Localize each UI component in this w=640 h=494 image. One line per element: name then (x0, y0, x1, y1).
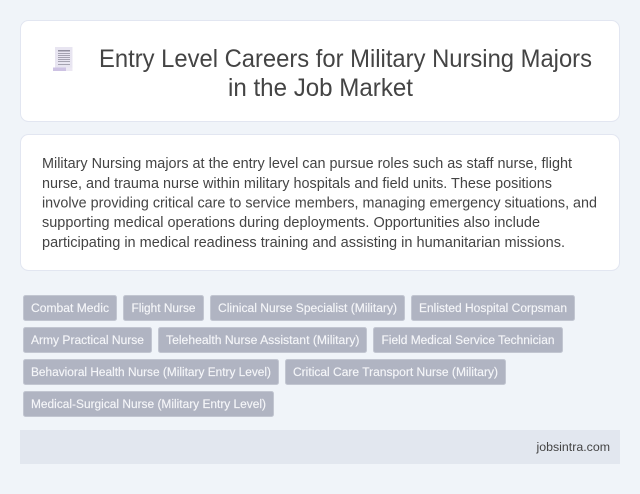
tag: Army Practical Nurse (24, 328, 152, 352)
tag: Critical Care Transport Nurse (Military): Critical Care Transport Nurse (Military) (293, 365, 498, 379)
tag: Enlisted Hospital Corpsman: Enlisted Hospital Corpsman (419, 301, 567, 315)
tag: Field Medical Service Technician (374, 328, 562, 352)
tag: Medical-Surgical Nurse (Military Entry Level): Medical-Surgical Nurse (Military Entry Level) (31, 397, 266, 411)
tag: Army Practical Nurse: Army Practical Nurse (31, 333, 144, 347)
tag: Flight Nurse (124, 296, 204, 320)
tag: Critical Care Transport Nurse (Military) (286, 360, 506, 384)
tag: Field Medical Service Technician: Field Medical Service Technician (382, 333, 555, 347)
icon: document scroll (53, 47, 72, 71)
text block: description: involve providing critical care to service members, managing emergency situations, and (42, 196, 597, 212)
tag: Telehealth Nurse Assistant (Military) (158, 328, 366, 352)
tag: Behavioral Health Nurse (Military Entry Level): Behavioral Health Nurse (Military Entry Level) (31, 365, 271, 379)
footer (20, 430, 620, 464)
title: in the Job Market (228, 74, 413, 102)
footer text: source: jobsintra.com (536, 440, 610, 454)
text block: description: nurse, and trauma nurse within military hospitals and field units. These positions (42, 176, 552, 192)
text block: description: participating in medical readiness training and assisting in humanitarian missions. (42, 235, 565, 251)
tag: Clinical Nurse Specialist (Military) (210, 296, 404, 320)
title: Entry Level Careers for Military Nursing Majors (99, 45, 592, 73)
tag: Combat Medic: Combat Medic (31, 301, 109, 315)
tag: Clinical Nurse Specialist (Military): Clinical Nurse Specialist (Military) (218, 301, 397, 315)
text block: description: supporting medical operations during deployments. Opportunities also include (42, 215, 540, 231)
panel: header (20, 20, 620, 122)
text block: description: Military Nursing majors at the entry level can pursue roles such as staff nurse, flight (42, 156, 572, 172)
tag: Medical-Surgical Nurse (Military Entry Level) (24, 392, 274, 416)
tag: Combat Medic (24, 296, 116, 320)
tag: Flight Nurse: Flight Nurse (132, 301, 196, 315)
tag: Enlisted Hospital Corpsman (412, 296, 574, 320)
tag: Behavioral Health Nurse (Military Entry Level) (24, 360, 278, 384)
text block: description (42, 156, 597, 251)
panel: description (20, 134, 620, 270)
title (99, 45, 592, 102)
tag: Telehealth Nurse Assistant (Military): Telehealth Nurse Assistant (Military) (166, 333, 360, 347)
tag list (24, 296, 574, 416)
